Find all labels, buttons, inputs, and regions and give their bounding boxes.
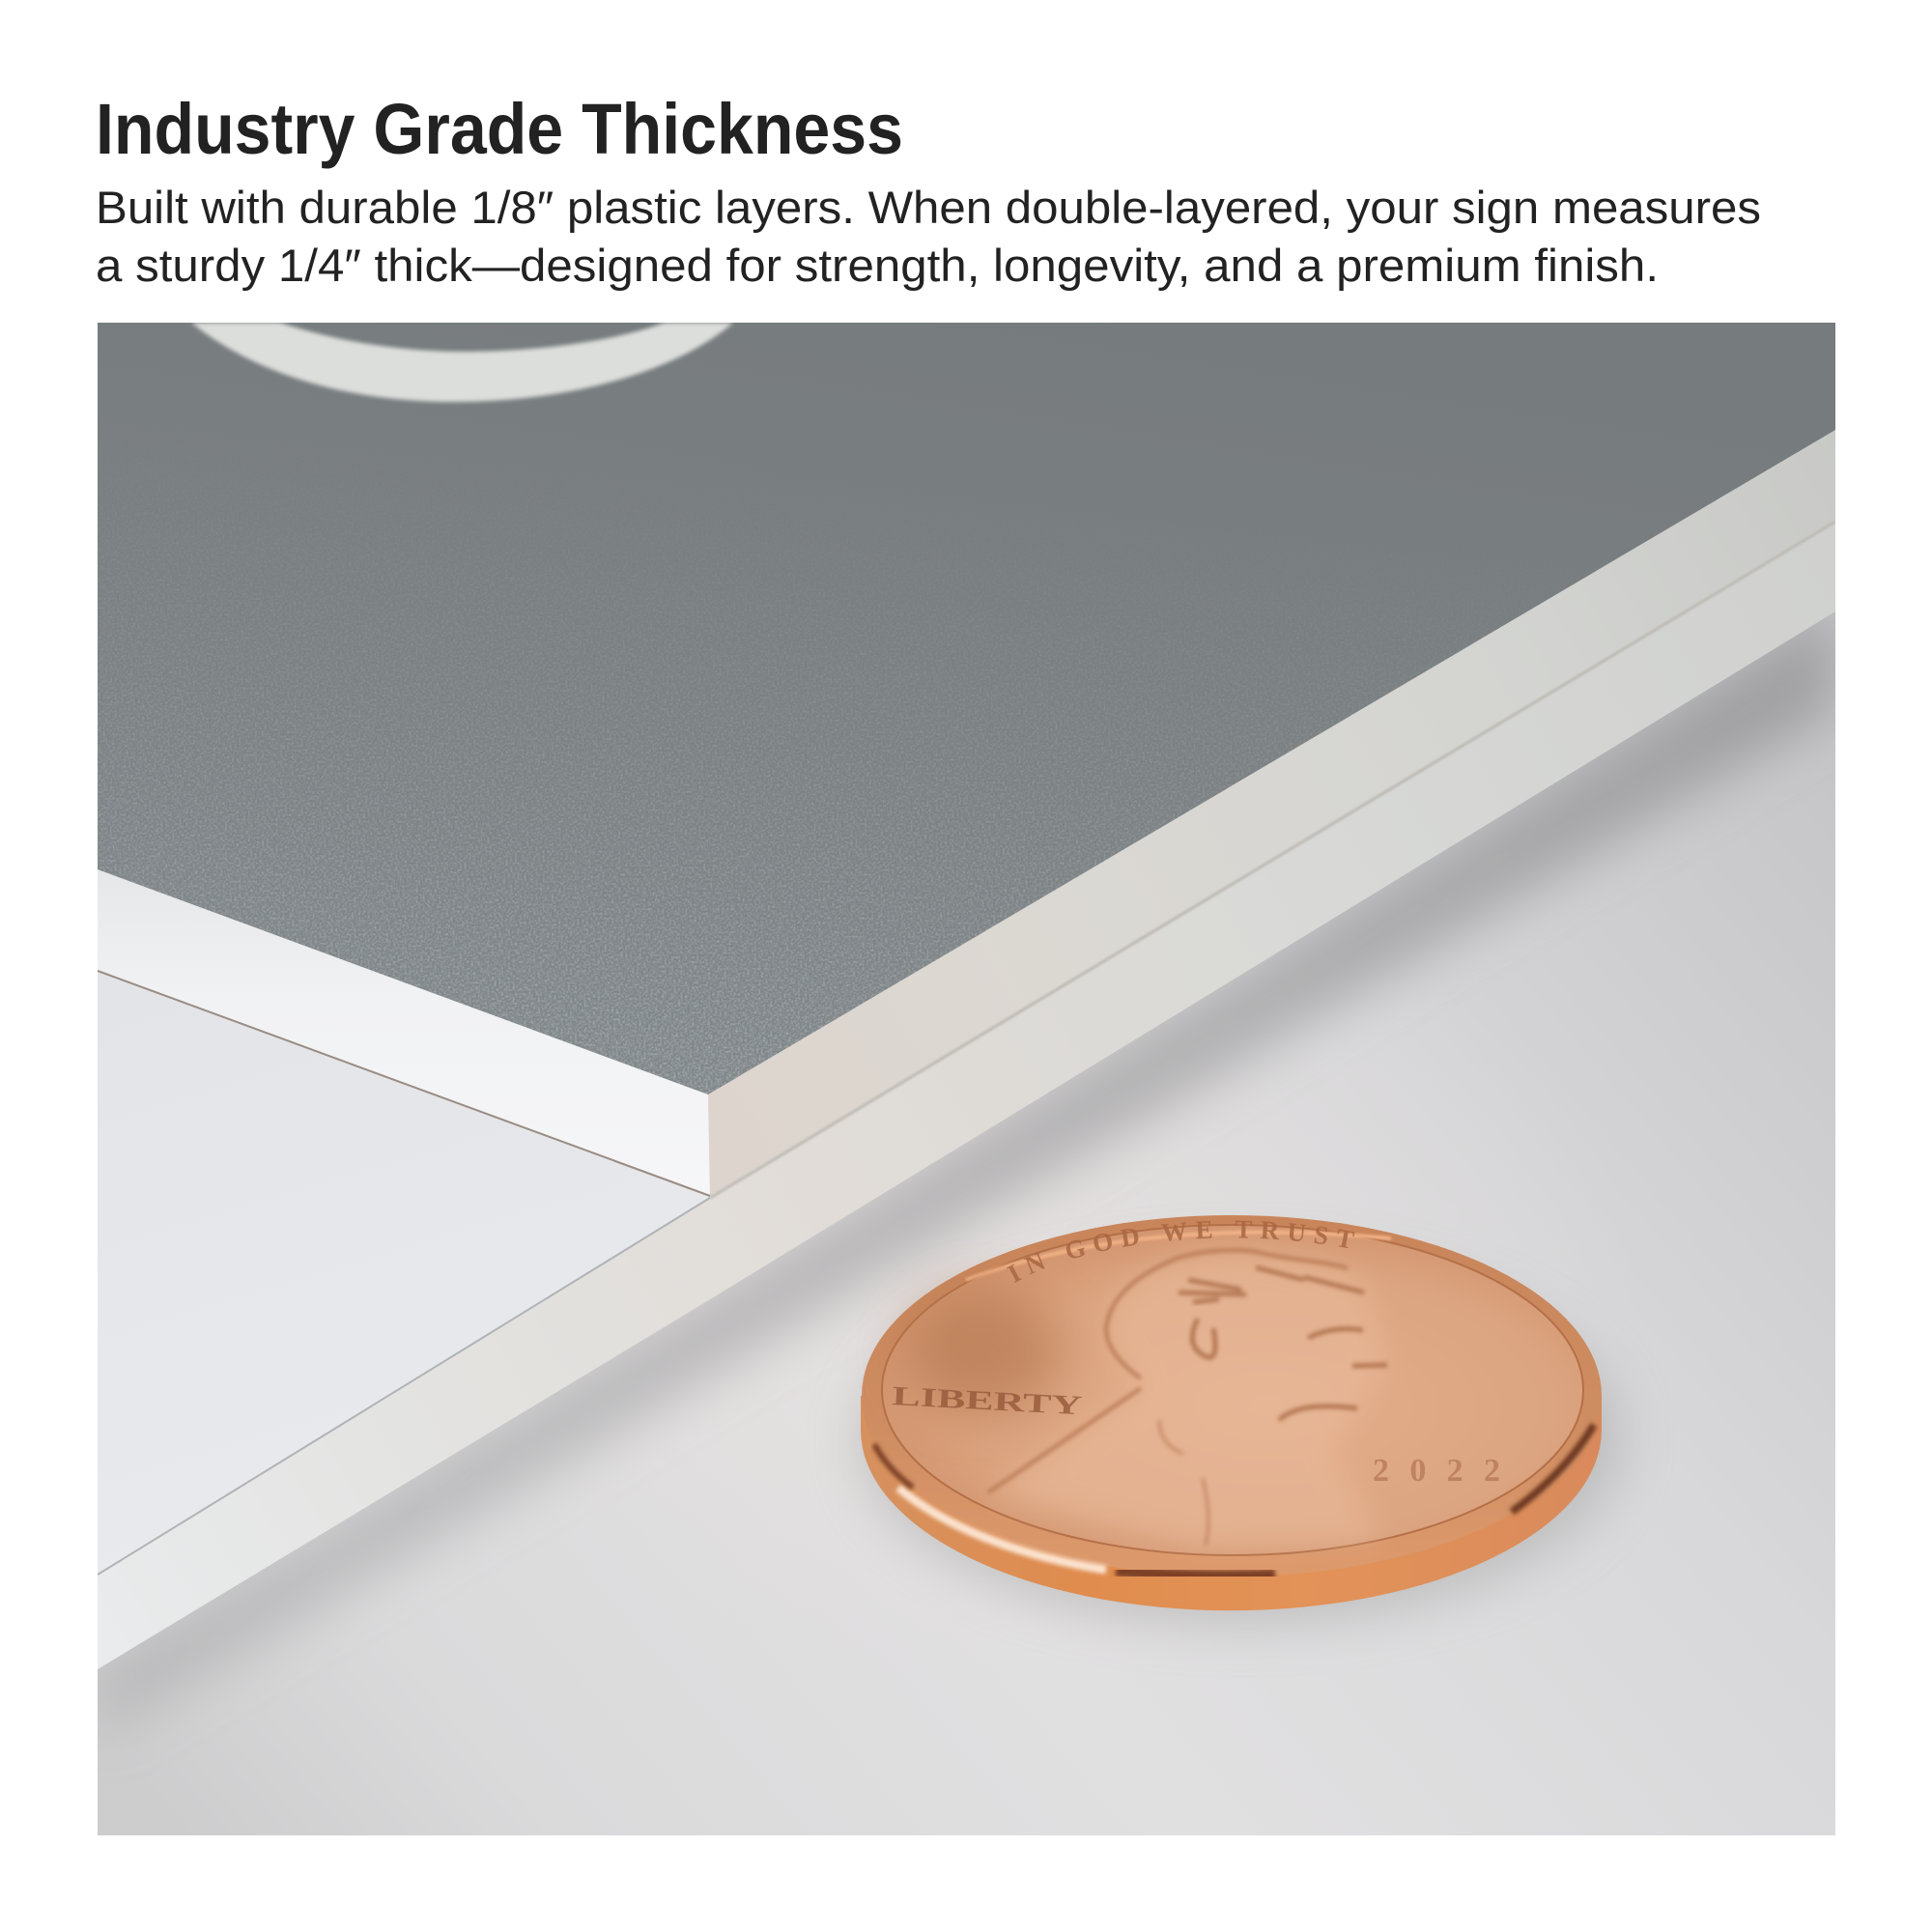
portrait hair strokes — [1179, 1267, 1364, 1302]
coin word liberty: LIBERTY — [892, 1381, 1083, 1421]
penny inner field — [882, 1225, 1583, 1555]
cut-out ring on gray surface — [191, 323, 733, 402]
photo panel: sign layers and penny — [98, 323, 1835, 1835]
upper layer side edge — [708, 523, 1718, 1196]
gray surface grain — [98, 543, 1445, 1094]
penny tarnish patch — [908, 1290, 1063, 1415]
penny side — [861, 1396, 1602, 1610]
coin date: 2022 — [1373, 1453, 1500, 1489]
penny face rim — [862, 1215, 1602, 1577]
description text: a sturdy 1/4″ thick—designed for strength, longevity, and a premium finish. — [96, 240, 1659, 291]
upper layer front face — [98, 869, 710, 1196]
seam between layers on front — [98, 971, 710, 1196]
coin motto: IN GOD WE TRUST — [1007, 1221, 1354, 1283]
gray printed top surface — [98, 323, 1835, 1094]
layer seam line — [710, 522, 1835, 1198]
penny left rim shadow — [874, 1444, 913, 1488]
portrait facial features — [1192, 1319, 1387, 1420]
penny — [861, 1215, 1602, 1611]
portrait — [988, 1249, 1387, 1546]
description text: Built with durable 1/8″ plastic layers. When double-layered, your sign measures — [96, 182, 1761, 233]
portrait lapel — [1159, 1420, 1208, 1546]
penny top rim glint — [966, 1233, 1391, 1280]
portrait bust — [988, 1249, 1387, 1546]
lower layer white face — [98, 971, 710, 1575]
penny dark rim patch — [1116, 1571, 1275, 1576]
penny shadow — [860, 1256, 1623, 1623]
description text — [96, 182, 1761, 291]
warm glow around penny — [386, 879, 1642, 1690]
shadow under sign edge — [98, 604, 1835, 1739]
penny rim highlight — [898, 1488, 1106, 1570]
penny right rim shadow — [1512, 1425, 1594, 1512]
table surface — [98, 323, 1835, 1835]
lower plane edge line — [98, 1198, 710, 1575]
lower layer side edge — [98, 522, 1835, 1669]
portrait outline — [988, 1250, 1348, 1492]
title: Industry Grade Thickness — [96, 89, 903, 169]
